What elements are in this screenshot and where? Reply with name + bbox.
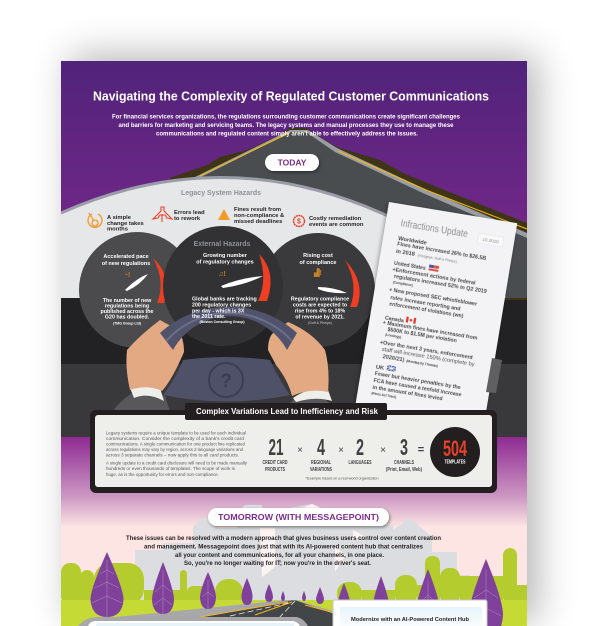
note body text: in the amount of fines levied (372, 385, 443, 402)
background: pale pink sky (61, 527, 527, 600)
intro text (112, 114, 460, 138)
total badge: 504 templates: 504 (443, 436, 467, 461)
icon: warning light: ♫! (218, 271, 226, 278)
equation labels: (Print, Email, Web) (386, 467, 422, 473)
gauge text: global banks: 200 regulatory changes (192, 302, 251, 308)
background: purple to pink gradient (61, 437, 527, 527)
panel title tab (185, 403, 387, 420)
hazard: fines result from non-compliance: non-compliance & (234, 213, 284, 219)
gauge: accelerated pace of new regulations: Accelerated pace (103, 254, 149, 260)
panel paragraph text: A single update to a credit card disclosure will need to be made manually (106, 460, 248, 466)
hazard: a simple change takes months: A simple (107, 215, 132, 221)
flag: Canada (406, 316, 416, 324)
panel title tab: Complex Variations Lead to Inefficiency and Risk (196, 407, 379, 416)
total badge: 504 templates (430, 427, 480, 477)
note body text: +Over the next 3 years, enforcement (379, 340, 473, 361)
note body text: + New proposed SEC whistleblower (389, 287, 478, 308)
note title: Infractions Update (400, 218, 469, 240)
gauge: rising cost of compliance: rise from 4% to 18% (295, 308, 345, 314)
equation labels: PRODUCTS (265, 467, 285, 473)
panel paragraph text (106, 430, 248, 477)
note body text: Fines have increased 26% to $26.5B (397, 241, 486, 262)
gauge: rising cost of compliance (274, 233, 375, 347)
pill: tomorrow with messagepoint: TOMORROW (WITH MESSAGEPOINT) (218, 512, 379, 522)
note body text: rules increase reporting and (390, 295, 461, 313)
equation labels: VARIATIONS (310, 467, 332, 473)
hazard: a simple change takes months: change takes (107, 221, 144, 227)
equation numbers: × (297, 445, 303, 456)
gauge: rising cost of compliance: of compliance (300, 260, 336, 266)
note body text: UK (375, 365, 385, 372)
footnote: *Example based on a real-world organization (306, 476, 379, 480)
panel: modernize card (333, 600, 487, 626)
gauge: accelerated pace of new regulations: of new regulations (102, 261, 150, 267)
gauge: rising cost of compliance: Rising cost (303, 253, 333, 259)
panel paragraph text: huge, as is the opportunity for errors and non-compliance. (106, 472, 219, 477)
gauge text: global banks: (Boston Consulting Group) (199, 320, 245, 324)
equation labels: CREDIT CARD (262, 460, 288, 466)
road: tomorrow (80, 600, 340, 626)
equation labels: CHANNELS (394, 460, 414, 466)
city skyline (135, 504, 470, 602)
note body text: regulators increased 52% in Q2 2019 (393, 274, 488, 295)
note body text: (Mondaq by Thomas) (406, 359, 438, 368)
equation labels: REGIONAL (311, 460, 331, 466)
equation numbers: 2 (356, 434, 364, 460)
gauge: rising cost of compliance: costs are expected to (293, 302, 348, 308)
mountains and road: today (170, 128, 527, 300)
icon: dial (88, 213, 102, 227)
note body text: $500K to $1.5M per violation (387, 327, 458, 344)
panel paragraph text: communication. Consider the complexity of a bank's credit card (106, 436, 245, 441)
icon: warning triangle (218, 209, 230, 220)
icon: warning light: ▟! (313, 268, 322, 277)
hazard: costly remediation events (294, 216, 364, 228)
ground (61, 600, 527, 626)
gauge: growing number of regulatory changes (163, 226, 283, 346)
intro text: For financial services organizations, the regulations surrounding customer communications create significant challenges (112, 114, 460, 120)
note body text: in 2018 (395, 249, 416, 258)
hills (61, 548, 527, 607)
gauge: growing number of regulatory changes: Growing number (203, 253, 248, 259)
hazard: errors lead to rework: to rework (174, 216, 201, 222)
tomorrow text: These issues can be resolved with a modern approach that gives business users control over content creation (126, 535, 441, 542)
dashboard hazard area (61, 177, 505, 298)
note body text: United States (394, 261, 426, 272)
gauge: accelerated pace of new regulations: (TMG Group Ltd) (113, 322, 141, 326)
equation numbers: × (338, 445, 344, 456)
pill: today (265, 154, 319, 171)
gauge: accelerated pace of new regulations: G20 has doubled. (105, 314, 150, 320)
equation numbers (268, 434, 424, 460)
tomorrow text: So, you're no longer waiting for IT; now you're in the driver's seat. (184, 560, 371, 567)
panel paragraph text: Legacy systems require a unique template to be used for each individual (106, 430, 246, 436)
background: purple sky (61, 61, 527, 223)
note body text: enforcement of violations (wn) (389, 301, 464, 320)
hazard: errors lead to rework (153, 207, 205, 222)
panel: left card bottom (78, 617, 308, 626)
date box: 10.2020 (482, 237, 499, 244)
steering wheel hub (163, 357, 290, 402)
date box (477, 233, 504, 247)
panel paragraph text: across regulations may vary by region, across 2 language variations and (106, 447, 243, 452)
note: infractions update (355, 202, 517, 430)
total badge: 504 templates: TEMPLATES (444, 460, 466, 466)
equation numbers: 21 (268, 434, 284, 460)
hazard: costly remediation events: events are common (309, 222, 364, 228)
note body text: Fewer but heavier penalties by the (374, 371, 462, 391)
steering wheel rim (160, 307, 297, 350)
panel paragraph text: hundreds or even thousands of templates. The scope of work is (106, 466, 236, 471)
icon: warning light: ◔! (124, 272, 130, 279)
gauge: rising cost of compliance: Regulatory compliance (291, 296, 349, 302)
gauge: accelerated pace of new regulations: regulations being (105, 304, 149, 310)
note body text: Worldwide (398, 236, 428, 247)
icon: question mark in circle: ? (220, 371, 232, 392)
gauge: accelerated pace of new regulations: published across the (101, 309, 154, 315)
right arm (268, 322, 332, 403)
note body text: 2020/21) (382, 354, 405, 364)
hazard: fines result from non-compliance: missed deadlines (234, 219, 282, 225)
steering wheel and hands (112, 307, 338, 412)
intro text: and barriers for marketing and servicing teams. The legacy systems and manual processes they use to manage these (118, 122, 454, 129)
gauge: growing number of regulatory changes: of regulatory changes (196, 260, 254, 266)
hazard: fines result from non-compliance (218, 207, 284, 223)
gauge: accelerated pace of new regulations: The number of new (103, 298, 152, 304)
hazard: a simple change takes months (88, 213, 144, 232)
equation numbers: 3 (400, 434, 408, 460)
equation numbers: 4 (317, 434, 325, 460)
gauge: rising cost of compliance: of revenue by 2021. (295, 314, 345, 320)
gauge text: global banks: per day - which is 3X (192, 308, 245, 314)
gauge text: global banks (192, 296, 257, 324)
equation numbers: × (380, 445, 386, 456)
intro text: communications and regulated content simply aren't able to effectively address the issues. (156, 130, 418, 138)
note body text: (Hedgeye, Duff & Phelps) (417, 253, 457, 264)
note body text: (Compliance) (393, 280, 413, 287)
panel: complex variations (90, 403, 497, 493)
hazard: errors lead to rework: Errors lead (174, 210, 205, 216)
trees (90, 552, 503, 626)
note body text: staff will increase 150% (complete by (381, 347, 475, 368)
gauge: accelerated pace of new regulations (79, 232, 177, 348)
tomorrow text: and management. Messagepoint does just that with its AI-powered content hub that centralizes (144, 544, 423, 550)
icon: dollar seal: $ (297, 218, 301, 226)
tomorrow text (126, 535, 441, 567)
note body text: + Maximum fines have increased from (382, 320, 478, 342)
note body text: Canada (384, 315, 405, 325)
panel: modernize card: Modernize with an AI-Powered Content Hub (351, 617, 469, 623)
flag: United States (428, 264, 439, 272)
note body text (371, 236, 487, 400)
flag: UK (386, 365, 396, 372)
page clip on note (486, 358, 502, 393)
note body text: FCA have caused a tenfold increase (373, 378, 463, 398)
panel paragraph text: communications. A single communication for one product line replicated (106, 442, 245, 446)
note body text: +Enforcement actions by federal (392, 267, 476, 287)
gauge text: global banks: the 2011 rate. (192, 314, 226, 320)
tomorrow text: all your content and communications, for all your channels, in one place. (175, 552, 384, 559)
gauge: rising cost of compliance: (Duff & Phelps) (308, 321, 332, 325)
panel paragraph text: across 3 separate channels – now apply this to all card products. (106, 452, 239, 458)
heading: legacy system hazards: Legacy System Hazards (181, 190, 261, 197)
pill: today: TODAY (278, 158, 307, 168)
note body text: (Fines Act Tract) (371, 391, 396, 399)
heading: external hazards: External Hazards (194, 241, 251, 248)
equation numbers: = (418, 444, 424, 456)
pill: tomorrow with messagepoint (208, 508, 389, 526)
hazard: a simple change takes months: months (107, 226, 128, 232)
hazard: costly remediation events: Costly remediation (309, 216, 362, 222)
title: Navigating the Complexity of Regulated Customer Communications (93, 88, 489, 104)
left arm (112, 320, 184, 412)
equation labels: LANGUAGES (348, 460, 372, 466)
gauge text: global banks: Global banks are tracking (192, 296, 257, 302)
note body text: (Lexology) (385, 333, 402, 339)
hazard: fines result from non-compliance: Fines result from (234, 207, 281, 213)
background: dark interior bands (61, 298, 527, 438)
icon: broken road (153, 207, 172, 222)
icon: question mark in circle (209, 363, 243, 397)
equation labels (262, 460, 422, 473)
